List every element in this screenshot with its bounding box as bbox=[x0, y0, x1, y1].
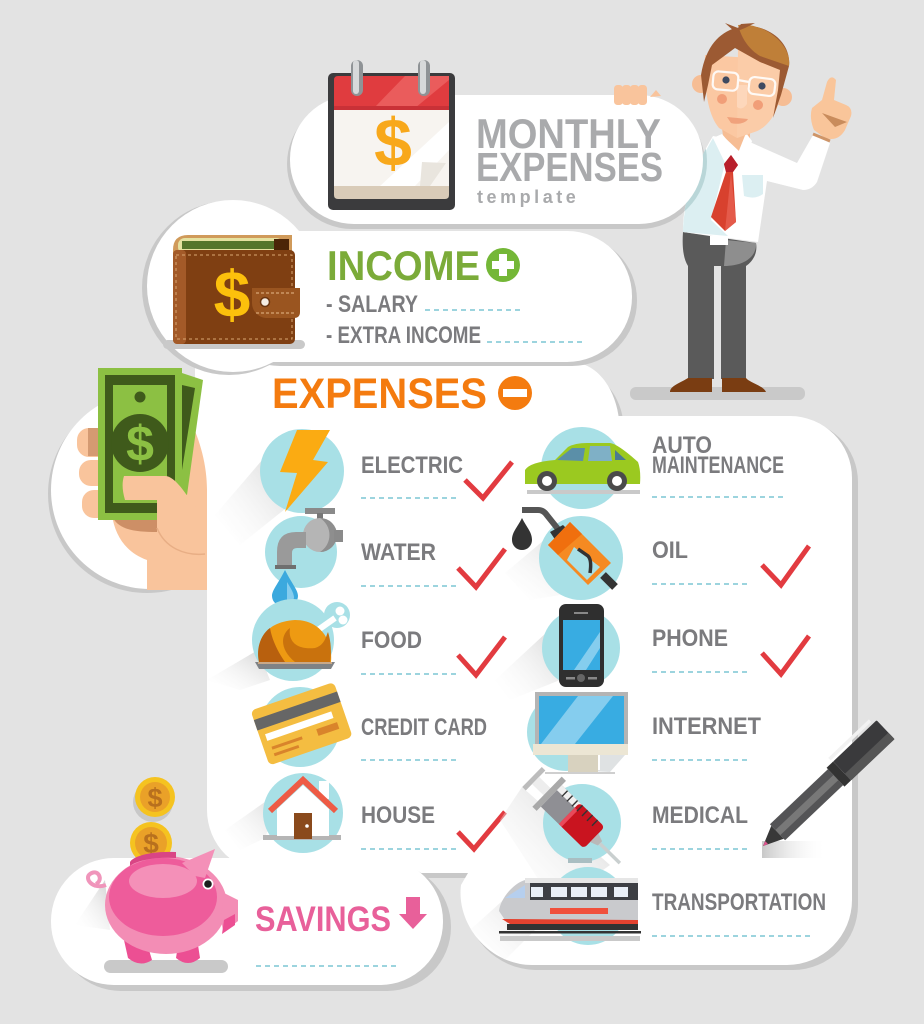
label: auto maintenance: MAINTENANCE bbox=[652, 452, 784, 479]
icon: calendar bbox=[328, 60, 455, 210]
label: credit card: CREDIT CARD bbox=[361, 714, 487, 741]
label: phone bbox=[652, 625, 809, 674]
label: medical: MEDICAL bbox=[652, 802, 748, 829]
title pill shadow bbox=[287, 99, 705, 229]
pill edge reflection on shirt bbox=[684, 148, 707, 211]
icon: internet monitor bbox=[527, 692, 628, 774]
icon: down arrow bbox=[399, 897, 427, 929]
icon: electric bbox=[215, 429, 344, 545]
icon: piggy bank bbox=[75, 849, 238, 973]
heading: monthly expenses template: MONTHLY bbox=[476, 110, 661, 157]
icon: plus bbox=[486, 248, 520, 282]
face bbox=[705, 55, 783, 138]
ears bbox=[692, 75, 710, 93]
pointing hand bbox=[811, 77, 851, 139]
income lines bbox=[326, 291, 585, 349]
calendar dollar sign: $ bbox=[374, 105, 412, 181]
label: oil: OIL bbox=[652, 537, 688, 564]
label: internet bbox=[652, 713, 761, 760]
panel: expenses background shadow bbox=[48, 368, 858, 970]
savings entry line bbox=[256, 965, 397, 967]
income lines: - SALARY bbox=[326, 291, 418, 318]
hair bbox=[701, 27, 789, 118]
ground shadow bbox=[630, 387, 805, 400]
icon: coins: $ bbox=[147, 783, 163, 813]
icon: fingers gripping pill bbox=[614, 85, 661, 105]
heading: monthly expenses template: template bbox=[477, 187, 578, 207]
label: house: HOUSE bbox=[361, 802, 435, 829]
label: credit card bbox=[361, 714, 487, 760]
collar bbox=[713, 133, 752, 163]
heading: monthly expenses template bbox=[476, 110, 663, 207]
icon: train bbox=[470, 867, 641, 960]
mouth bbox=[727, 117, 748, 124]
icon: phone bbox=[495, 604, 620, 700]
label: electric: ELECTRIC bbox=[361, 452, 463, 479]
icon: pen bbox=[750, 716, 895, 858]
panel: income pill bbox=[142, 200, 637, 375]
label: oil bbox=[652, 537, 809, 585]
icon: coins: $ bbox=[143, 828, 159, 859]
tie bbox=[711, 155, 738, 231]
icon: wallet bbox=[163, 235, 305, 349]
heading: monthly expenses template: EXPENSES bbox=[476, 144, 663, 190]
icon: car bbox=[525, 427, 640, 509]
label: internet: INTERNET bbox=[652, 713, 761, 740]
icon: medical syringe bbox=[500, 762, 635, 905]
nose bbox=[737, 85, 747, 108]
heading: expenses: EXPENSES bbox=[272, 370, 487, 418]
label: medical bbox=[652, 802, 750, 849]
cheeks bbox=[717, 94, 727, 104]
panel: title pill bbox=[290, 95, 703, 224]
shirt bbox=[683, 135, 830, 242]
label: transportation: TRANSPORTATION bbox=[652, 889, 826, 916]
icon: hand holding money bbox=[77, 368, 207, 590]
label: water bbox=[361, 539, 505, 587]
icon: coins bbox=[130, 777, 175, 864]
legs bbox=[683, 232, 756, 379]
icon: minus bbox=[498, 376, 532, 410]
heading: income: INCOME bbox=[327, 242, 480, 289]
icon: oil pump bbox=[505, 510, 623, 600]
icon: food roast chicken bbox=[207, 599, 350, 690]
panel: savings pill bbox=[51, 858, 451, 991]
bill dollar sign: $ bbox=[126, 416, 154, 472]
label: water: WATER bbox=[361, 539, 436, 566]
income lines: - EXTRA INCOME bbox=[326, 322, 481, 349]
label: auto maintenance: AUTO bbox=[652, 432, 712, 459]
shirt tag bbox=[710, 236, 728, 245]
icon: water faucet bbox=[265, 508, 343, 607]
label: food: FOOD bbox=[361, 627, 422, 654]
shoes bbox=[670, 378, 712, 392]
label: phone: PHONE bbox=[652, 625, 728, 652]
icon: credit card bbox=[251, 682, 353, 767]
label: electric bbox=[361, 452, 512, 498]
panel: expenses white card bbox=[51, 362, 852, 965]
label: house bbox=[361, 802, 505, 849]
glasses bbox=[712, 71, 776, 97]
wallet dollar sign: $ bbox=[214, 257, 250, 331]
heading: savings: SAVINGS bbox=[255, 900, 391, 939]
label: food bbox=[361, 627, 505, 675]
label: auto maintenance bbox=[652, 432, 784, 497]
neck bbox=[722, 128, 750, 152]
character: businessman bbox=[630, 23, 851, 400]
icon: house bbox=[225, 773, 343, 853]
